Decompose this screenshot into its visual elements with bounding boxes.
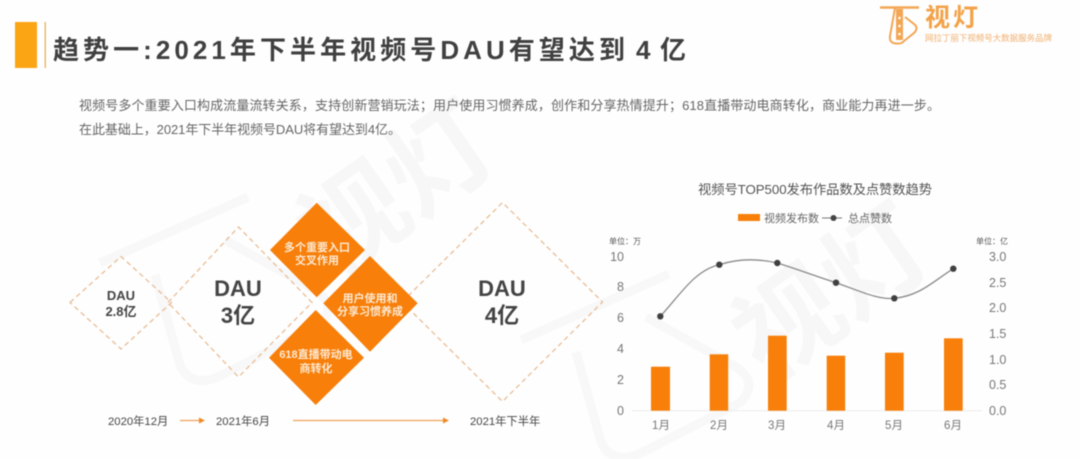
left axis: 2 — [617, 373, 624, 387]
line: total likes — [657, 260, 956, 319]
diamond: DAU 3亿: 3亿 — [221, 303, 255, 328]
left axis: 8 — [617, 280, 624, 294]
right axis: 0.0 — [989, 404, 1006, 418]
logo name: 视灯 — [925, 4, 978, 32]
x axis labels: 6月 — [944, 420, 962, 432]
orange diamond: entry points — [270, 203, 365, 297]
right axis: 3.0 — [989, 250, 1006, 264]
bars — [651, 336, 963, 411]
x axis labels: 4月 — [827, 420, 845, 432]
diamond: DAU 2.8亿 — [70, 256, 172, 349]
timeline: 2021年6月 — [216, 414, 270, 428]
diamond: DAU 4亿 — [402, 202, 602, 402]
diagram: DAU growth — [70, 202, 602, 405]
legend: 总点赞数 — [848, 211, 892, 225]
orange diamond: 618 live: 商转化 — [300, 361, 332, 375]
legend: 视频发布数 — [764, 211, 819, 225]
chart title: 视频号TOP500发布作品数及点赞数趋势 — [698, 182, 932, 197]
right axis: 0.5 — [989, 378, 1006, 392]
diamond: DAU 3亿 — [168, 227, 312, 377]
intro text: 视频号多个重要入口构成流量流转关系，支持创新营销玩法；用户使用习惯养成，创作和分享热情提升；618直播带动电商转化，商业能力再进一步。 — [79, 98, 940, 114]
intro text: 在此基础上，2021年下半年视频号DAU将有望达到4亿。 — [79, 122, 401, 137]
diamond: DAU 2.8亿: 2.8亿 — [105, 304, 137, 319]
left axis: 10 — [610, 250, 624, 264]
title: 亿 — [660, 35, 686, 65]
right axis: 1.0 — [989, 353, 1006, 367]
right axis: 2.0 — [989, 301, 1006, 315]
left axis: 单位：万 — [609, 236, 641, 246]
right axis: 2.5 — [989, 276, 1006, 290]
arrow: second step — [293, 418, 449, 424]
watermark: 视灯 — [713, 186, 952, 402]
title: 4 — [636, 35, 651, 65]
logo — [880, 4, 1052, 44]
orange diamond: user habits — [323, 256, 418, 352]
diamond: DAU 3亿: DAU — [214, 276, 262, 301]
left axis: 4 — [617, 342, 624, 356]
baseline — [632, 410, 982, 412]
left axis: 6 — [617, 311, 624, 325]
arrow: first step — [180, 418, 205, 424]
left axis: 0 — [617, 404, 624, 418]
watermark — [100, 83, 952, 458]
title accent bar — [15, 22, 46, 68]
x axis labels: 2月 — [710, 420, 728, 432]
x axis labels: 1月 — [652, 420, 670, 432]
orange diamond: entry points: 多个重要入口 — [284, 240, 350, 254]
orange diamond: entry points: 交叉作用 — [295, 253, 339, 267]
timeline: 2020年12月 — [108, 414, 168, 428]
timeline: 2021年下半年 — [470, 414, 540, 428]
orange diamond: 618 live — [269, 310, 364, 405]
x axis labels: 5月 — [885, 420, 903, 432]
logo tagline: 网拉丁丽下视频号大数据服务品牌 — [925, 33, 1052, 43]
title: 趋势一:2021年下半年视频号DAU有望达到 — [53, 35, 625, 65]
orange diamond: 618 live: 618直播带动电 — [279, 347, 353, 361]
x axis labels — [652, 420, 962, 432]
left axis — [609, 236, 641, 418]
diamond: DAU 4亿: 4亿 — [485, 303, 519, 328]
orange diamond: user habits: 用户使用和 — [342, 291, 398, 305]
icon: lighthouse play — [880, 8, 919, 44]
intro text — [79, 98, 940, 137]
legend — [738, 211, 892, 225]
right axis — [976, 236, 1008, 418]
chart: TOP500 trend — [609, 182, 1008, 432]
orange diamond: user habits: 分享习惯养成 — [337, 304, 403, 318]
right axis: 1.5 — [989, 327, 1006, 341]
watermark: 视灯 — [278, 83, 517, 299]
right axis: 单位：亿 — [976, 236, 1008, 246]
x axis labels: 3月 — [768, 420, 786, 432]
diamond: DAU 4亿: DAU — [478, 276, 526, 301]
timeline — [108, 414, 540, 428]
diamond: DAU 2.8亿: DAU — [107, 288, 135, 303]
